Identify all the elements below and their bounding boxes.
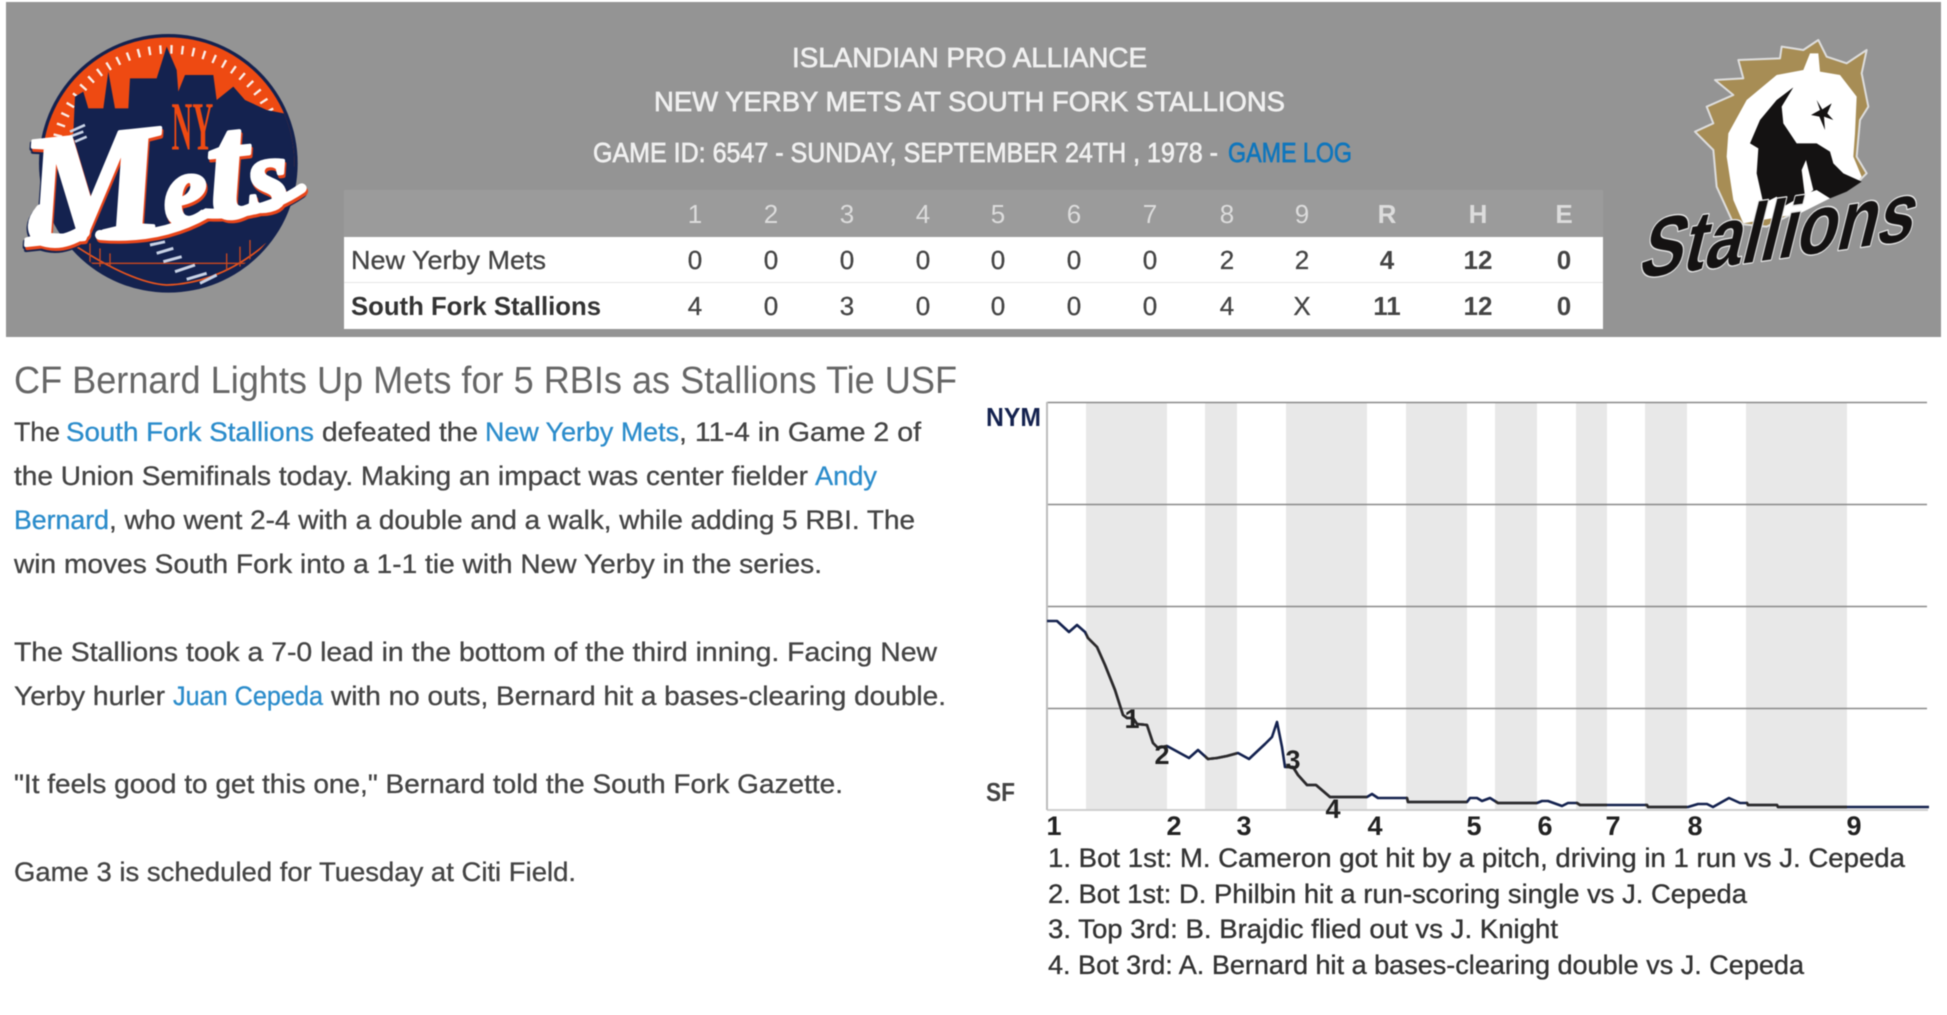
labels: event markers: 4: [1325, 794, 1341, 824]
table: line score: 0: [1067, 245, 1081, 275]
labels: event markers: 1: [1124, 704, 1140, 734]
table: line score: 0: [1143, 245, 1157, 275]
text block: article body: Juan Cepeda: [173, 681, 323, 711]
table: line score: [344, 190, 1603, 329]
labels: event markers: 3: [1285, 745, 1301, 775]
labels: inning axis: 5: [1466, 811, 1482, 841]
table: line score: 0: [1557, 245, 1571, 275]
text block: article body: win moves South Fork into a 1-1 tie with New Yerby in the series.: [13, 549, 822, 579]
labels: event markers: [1124, 704, 1341, 824]
text block: article body: with no outs, Bernard hit a bases-clearing double.: [330, 681, 946, 711]
table: line score: 0: [840, 245, 854, 275]
legend: key plays: 4. Bot 3rd: A. Bernard hit a bases-clearing double vs J. Cepeda: [1048, 950, 1805, 980]
text block: article body: Game 3 is scheduled for Tuesday at Citi Field.: [14, 857, 576, 887]
label: SF axis: SF: [986, 777, 1015, 807]
legend: key plays: 3. Top 3rd: B. Brajdic flied out vs J. Knight: [1048, 914, 1559, 944]
table: line score: 2: [1295, 245, 1309, 275]
legend: key plays: [1048, 843, 1906, 980]
table: line score: New Yerby Mets: [351, 245, 546, 275]
text: Mets script wordmark: t: [198, 82, 261, 252]
text block: article body: Yerby hurler: [14, 681, 165, 711]
text block: article body: the Union Semifinals today. Making an impact was center fielder: [14, 461, 808, 491]
labels: inning axis: 1: [1046, 811, 1062, 841]
text block: article body: defeated the: [322, 417, 478, 447]
table: line score: 7: [1143, 199, 1157, 229]
table: line score: 2: [764, 199, 778, 229]
labels: inning axis: 3: [1236, 811, 1252, 841]
table: line score: 0: [1067, 291, 1081, 321]
table: line score: 0: [1143, 291, 1157, 321]
table: line score: 9: [1295, 199, 1309, 229]
link: game log: GAME LOG: [1228, 137, 1352, 168]
text block: article body: Andy: [815, 461, 878, 491]
labels: inning axis: 8: [1687, 811, 1703, 841]
labels: inning axis: 6: [1537, 811, 1553, 841]
labels: event markers: 2: [1154, 740, 1170, 770]
text block: article body: , who went 2-4 with a double and a walk, while adding 5 RBI. The: [109, 505, 915, 535]
table: line score: 3: [840, 291, 854, 321]
table: line score: 0: [1557, 291, 1571, 321]
table: line score: 0: [991, 291, 1005, 321]
table: line score: E: [1555, 199, 1573, 229]
chart: win probability: [986, 402, 1929, 841]
table: line score: 0: [991, 245, 1005, 275]
text block: article body: New Yerby Mets: [485, 417, 679, 447]
text: Mets script wordmark: M: [10, 91, 175, 279]
table: line score: 0: [916, 291, 930, 321]
panel: game header: [6, 2, 1941, 337]
table: line score: South Fork Stallions: [351, 291, 601, 321]
table: line score: 4: [688, 291, 702, 321]
legend: key plays: 2. Bot 1st: D. Philbin hit a run-scoring single vs J. Cepeda: [1048, 879, 1748, 909]
labels: inning axis: 7: [1605, 811, 1621, 841]
heading: article headline: CF Bernard Lights Up Mets for 5 RBIs as Stallions Tie USF: [14, 360, 957, 402]
table: line score: 2: [1220, 245, 1234, 275]
table: line score: 3: [840, 199, 854, 229]
icon: Mets logo: NY: [171, 88, 213, 164]
labels: inning axis: 9: [1846, 811, 1862, 841]
text block: article body: , 11-4 in Game 2 of: [679, 417, 922, 447]
table: line score: 0: [764, 291, 778, 321]
table: line score: 4: [1220, 291, 1234, 321]
heading: league name: ISLANDIAN PRO ALLIANCE: [792, 42, 1147, 73]
table: line score: 0: [916, 245, 930, 275]
table: line score: 12: [1464, 245, 1492, 275]
text block: article body: [13, 417, 946, 887]
table: line score: 1: [688, 199, 702, 229]
text block: article body: "It feels good to get this one," Bernard told the South Fork Gazette.: [14, 769, 843, 799]
label: NYM axis: NYM: [986, 402, 1041, 432]
icon: Stallions logo: [1632, 40, 1930, 296]
table: line score: 12: [1464, 291, 1492, 321]
text: Mets script wordmark: [10, 78, 302, 279]
table: line score: 5: [991, 199, 1005, 229]
table: line score: 0: [764, 245, 778, 275]
table: line score: 4: [1380, 245, 1395, 275]
labels: inning axis: 4: [1367, 811, 1383, 841]
text: game details: GAME ID: 6547 - SUNDAY, SEPTEMBER 24TH , 1978 -: [593, 137, 1218, 168]
text: Mets script wordmark: s: [241, 117, 294, 234]
text block: article body: Bernard: [14, 505, 109, 535]
table: line score: H: [1469, 199, 1487, 229]
table: line score: 8: [1220, 199, 1234, 229]
table: line score: 11: [1373, 291, 1401, 321]
labels: inning axis: [1046, 811, 1862, 841]
table: line score: 4: [916, 199, 930, 229]
table: line score: X: [1293, 291, 1311, 321]
line: win probability curve: [1047, 621, 1929, 807]
text block: article body: South Fork Stallions: [66, 417, 314, 447]
table: line score: R: [1378, 199, 1397, 229]
icon: Mets logo: [10, 33, 307, 300]
legend: key plays: 1. Bot 1st: M. Cameron got hit by a pitch, driving in 1 run vs J. Cepeda: [1048, 843, 1906, 873]
table: line score: 0: [688, 245, 702, 275]
text: Mets script wordmark: e: [157, 132, 213, 247]
labels: inning axis: 2: [1166, 811, 1182, 841]
text block: article body: The Stallions took a 7-0 lead in the bottom of the third inning. Facing New: [14, 637, 938, 667]
heading: matchup: NEW YERBY METS AT SOUTH FORK STALLIONS: [654, 86, 1285, 117]
text block: article body: The: [14, 417, 60, 447]
table: line score: 6: [1067, 199, 1081, 229]
